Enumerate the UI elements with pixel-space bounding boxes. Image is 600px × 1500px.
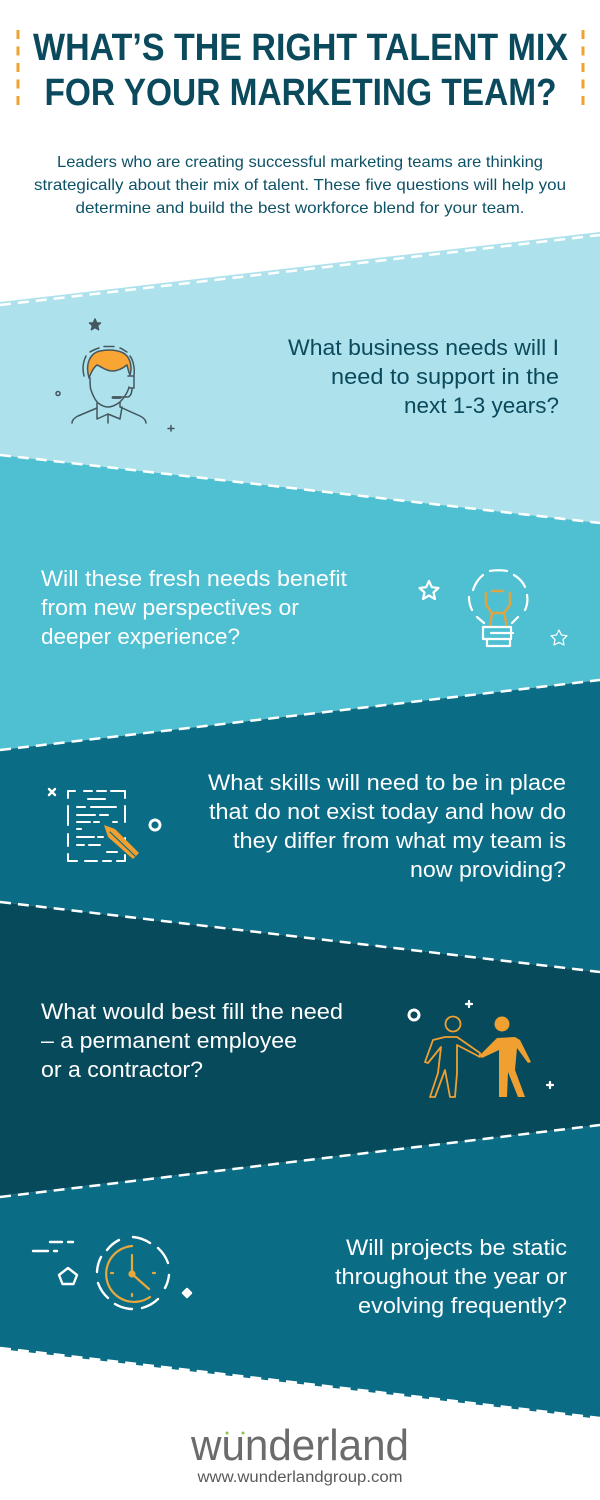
question 4 text: or a contractor?: [41, 1057, 203, 1082]
intro text: strategically about their mix of talent. These five questions will help you: [34, 177, 566, 194]
question 3 text: they differ from what my team is: [233, 828, 566, 853]
logo: wunderland: wunderland: [190, 1421, 409, 1470]
question 3 text: now providing?: [410, 857, 566, 882]
star: [420, 581, 438, 599]
question 5 text: [335, 1235, 567, 1318]
right dashed title bracket: [582, 30, 584, 112]
intro text: Leaders who are creating successful marketing teams are thinking: [57, 154, 543, 171]
question 5 text: throughout the year or: [335, 1264, 567, 1289]
panel: question 4: [0, 902, 600, 1196]
question 3 text: What skills will need to be in place: [208, 770, 566, 795]
icon: document and pencil: [49, 789, 160, 861]
question 5 text: Will projects be static: [346, 1235, 567, 1260]
icon: support agent with headset: [56, 319, 174, 431]
question 4 text: [41, 999, 343, 1082]
left dashed title bracket: [16, 30, 20, 112]
star: [90, 319, 100, 330]
icon: light bulb: [420, 570, 567, 646]
question 1 text: [288, 335, 559, 418]
intro text: [34, 154, 566, 217]
question 2 text: deeper experience?: [41, 624, 240, 649]
dashed band separators: [0, 235, 600, 1418]
panel: question 1: [0, 232, 600, 523]
question 1 text: What business needs will I: [288, 335, 559, 360]
icon: handshake: [409, 1001, 553, 1097]
pencil: [104, 825, 139, 859]
question 4 text: What would best fill the need: [41, 999, 343, 1024]
question 2 text: from new perspectives or: [41, 595, 299, 620]
icon: clock: [33, 1237, 191, 1309]
question 1 text: need to support in the: [331, 364, 559, 389]
website url: www.wunderlandgroup.com: [196, 1469, 402, 1486]
title: [33, 27, 569, 114]
small star: [551, 630, 567, 645]
circle: [56, 392, 60, 396]
panel: question 3: [0, 680, 600, 972]
panel: question 2: [0, 455, 600, 750]
question 1 text: next 1-3 years?: [404, 393, 559, 418]
plus: [168, 426, 174, 431]
intro text: determine and build the best workforce blend for your team.: [76, 200, 524, 217]
panel: question 5: [0, 1125, 600, 1419]
question 3 text: that do not exist today and how do: [209, 799, 566, 824]
question 2 text: [41, 566, 347, 649]
question 5 text: evolving frequently?: [358, 1293, 567, 1318]
question 3 text: [208, 770, 566, 882]
question 2 text: Will these fresh needs benefit: [41, 566, 347, 591]
question 4 text: – a permanent employee: [41, 1028, 297, 1053]
